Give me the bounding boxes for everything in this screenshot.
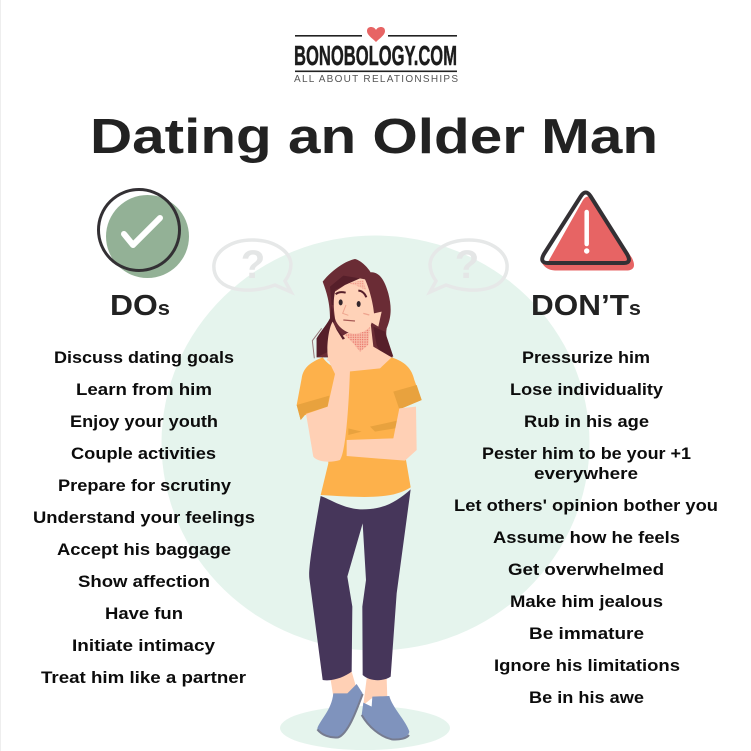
list: don'ts: Let others' opinion bother you — [454, 497, 718, 515]
heading: DON'Ts: DON’T s — [531, 290, 641, 322]
list: don'ts: Ignore his limitations — [494, 657, 680, 675]
list: don'ts: Assume how he feels — [493, 529, 680, 547]
list: don'ts: Pester him to be your +1 — [482, 445, 691, 463]
floor shadow ellipse — [280, 706, 450, 750]
icon: right question bubble — [430, 240, 507, 292]
illustration: thinking woman — [297, 259, 422, 739]
title: Dating an Older Man — [90, 110, 658, 164]
icon: right question bubble: ? — [455, 243, 479, 287]
icon: left question bubble — [214, 240, 291, 292]
list: don'ts: Be immature — [529, 625, 644, 643]
list: dos: Treat him like a partner — [41, 669, 247, 687]
icon: check mark — [98, 190, 189, 278]
logo: Bonobology — [294, 27, 458, 85]
icon: warning triangle — [542, 192, 634, 270]
list: dos: Couple activities — [71, 445, 216, 463]
list: dos: Learn from him — [76, 381, 212, 399]
list: dos: Understand your feelings — [33, 509, 255, 527]
logo: Bonobology: BONOBOLOGY.COM — [294, 40, 457, 71]
logo: Bonobology: ALL ABOUT RELATIONSHIPS — [294, 74, 458, 85]
list: don'ts — [454, 349, 718, 707]
heading: DOs: DOs — [110, 290, 170, 322]
list: dos: Enjoy your youth — [70, 413, 218, 431]
background circle — [162, 236, 590, 650]
woman: torso, head and arms — [297, 259, 422, 497]
list: dos — [33, 349, 255, 687]
list: dos: Prepare for scrutiny — [58, 477, 232, 495]
list: dos: Discuss dating goals — [54, 349, 234, 367]
list: dos: Have fun — [105, 605, 183, 623]
list: don'ts: Pressurize him — [522, 349, 650, 367]
list: don'ts: Rub in his age — [524, 413, 649, 431]
list: don'ts: Lose individuality — [510, 381, 664, 399]
list: don'ts: Get overwhelmed — [508, 561, 664, 579]
list: don'ts: Be in his awe — [529, 689, 644, 707]
list: don'ts: everywhere — [534, 465, 638, 483]
list: don'ts: Make him jealous — [510, 593, 663, 611]
woman: legs and shoes — [309, 489, 411, 739]
icon: left question bubble: ? — [241, 243, 265, 287]
list: dos: Accept his baggage — [57, 541, 231, 559]
list: dos: Initiate intimacy — [72, 637, 216, 655]
list: dos: Show affection — [78, 573, 210, 591]
